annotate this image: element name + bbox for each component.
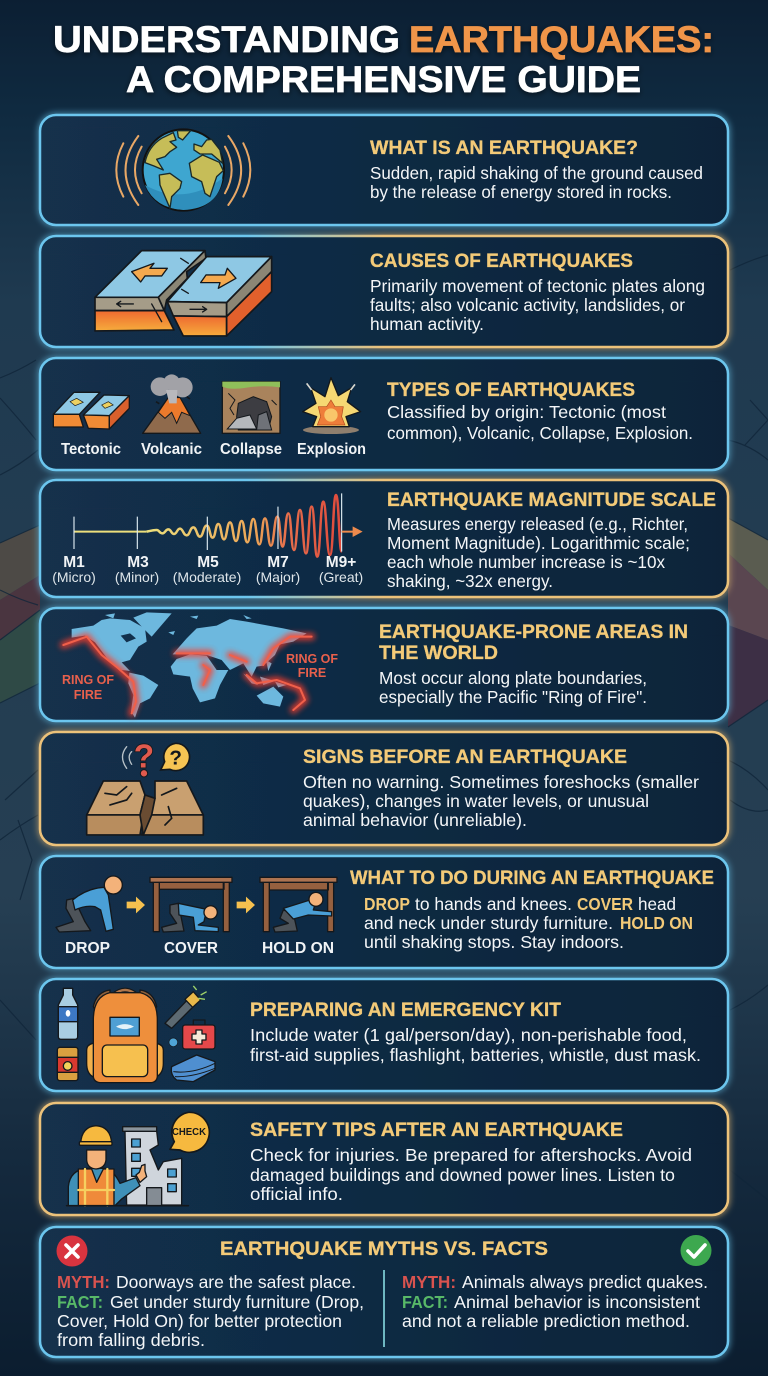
- body text: quakes), changes in water levels, or unusual: [303, 791, 649, 811]
- body text: shaking, ~32x energy.: [387, 571, 553, 591]
- heading: WHAT IS AN EARTHQUAKE?: [370, 137, 638, 159]
- body text: common), Volcanic, Collapse, Explosion.: [387, 423, 693, 443]
- heading: EARTHQUAKE-PRONE AREAS IN: [379, 621, 688, 643]
- scale labels: (Great): [319, 569, 363, 585]
- body text: each whole number increase is ~10x: [387, 552, 665, 572]
- panel: signs before an earthquake: [40, 732, 728, 845]
- action labels: [65, 940, 334, 957]
- scale labels: M1: [63, 554, 85, 571]
- body text: Often no warning. Sometimes foreshocks (smaller: [303, 772, 699, 792]
- icon: cracked ground with question marks: ?: [134, 739, 154, 776]
- scale labels: M9+: [326, 554, 356, 571]
- body text: [370, 163, 703, 202]
- icon: cover under table: [150, 877, 232, 932]
- title: EARTHQUAKES:: [409, 18, 714, 60]
- scale labels: (Minor): [115, 569, 159, 585]
- type labels: Tectonic: [61, 441, 121, 458]
- body text: head: [638, 894, 676, 914]
- heading: TYPES OF EARTHQUAKES: [387, 379, 635, 401]
- left myth and fact: Cover, Hold On) for better protection: [57, 1311, 342, 1331]
- icon: tectonic: [53, 392, 129, 429]
- heading: EARTHQUAKE MAGNITUDE SCALE: [387, 489, 716, 511]
- body text: damaged buildings and downed power lines. Listen to: [250, 1165, 675, 1185]
- body text: Check for injuries. Be prepared for aftershocks. Avoid: [250, 1145, 692, 1165]
- divider: [383, 1270, 385, 1347]
- left myth and fact: Get under sturdy furniture (Drop,: [110, 1292, 364, 1312]
- heading: PREPARING AN EMERGENCY KIT: [250, 999, 561, 1021]
- panel: causes of earthquakes: [40, 236, 728, 347]
- body text: official info.: [250, 1184, 343, 1204]
- icon: hold on under table: [260, 877, 337, 932]
- map: world with ring of fire: [63, 612, 312, 718]
- left myth and fact: [57, 1272, 364, 1350]
- right myth and fact: FACT:: [402, 1292, 448, 1312]
- heading: WHAT TO DO DURING AN EARTHQUAKE: [350, 867, 714, 889]
- scale labels: M3: [127, 554, 149, 571]
- panel: earthquake-prone areas: [40, 608, 728, 721]
- left myth and fact: MYTH:: [57, 1272, 110, 1292]
- right myth and fact: and not a reliable prediction method.: [402, 1311, 690, 1331]
- left myth and fact: Doorways are the safest place.: [116, 1272, 356, 1292]
- body text: Moment Magnitude). Logarithmic scale;: [387, 533, 690, 553]
- body text: faults; also volcanic activity, landslides, or: [370, 295, 685, 315]
- arrow: [237, 897, 255, 913]
- body text: [387, 514, 690, 591]
- icon: cracked ground with question marks: [87, 739, 203, 835]
- body text: Include water (1 gal/person/day), non-perishable food,: [250, 1025, 687, 1045]
- body text: Classified by origin: Tectonic (most: [387, 402, 666, 422]
- body text: until shaking stops. Stay indoors.: [364, 932, 624, 952]
- body text: [364, 894, 693, 952]
- chart: magnitude wave: [74, 493, 363, 557]
- scale labels: M5: [197, 554, 219, 571]
- panel: myths vs facts: [40, 1227, 728, 1357]
- title: [53, 18, 714, 100]
- right myth and fact: Animals always predict quakes.: [462, 1272, 708, 1292]
- body text: DROP: [364, 894, 410, 914]
- body text: [250, 1145, 692, 1204]
- heading: THE WORLD: [379, 642, 498, 664]
- scale labels: (Micro): [52, 569, 96, 585]
- type labels: Explosion: [297, 441, 366, 458]
- type labels: Volcanic: [141, 441, 202, 458]
- body text: especially the Pacific "Ring of Fire".: [379, 687, 647, 707]
- type labels: [61, 441, 366, 458]
- icon: inspector and damaged building: [67, 1112, 209, 1206]
- scale labels: (Moderate): [173, 569, 241, 585]
- panel: safety tips after: [40, 1103, 728, 1215]
- right myth and fact: [402, 1272, 708, 1331]
- icon: cracked ground with question marks: ?: [169, 746, 182, 769]
- body text: HOLD ON: [620, 913, 693, 933]
- title: A COMPREHENSIVE GUIDE: [126, 58, 641, 100]
- heading: [379, 621, 688, 664]
- body text: to hands and knees.: [415, 894, 572, 914]
- action labels: DROP: [65, 940, 110, 957]
- panel: magnitude scale: [40, 480, 728, 597]
- icon: drop: [56, 876, 122, 932]
- map labels: FIRE: [298, 666, 326, 680]
- left myth and fact: from falling debris.: [57, 1330, 205, 1350]
- map labels: [62, 652, 338, 702]
- icon: green check: [680, 1235, 712, 1266]
- icon: tectonic plates: [95, 251, 272, 336]
- body text: first-aid supplies, flashlight, batteries, whistle, dust mask.: [250, 1045, 701, 1065]
- icon: emergency kit items: [57, 986, 215, 1083]
- body text: Measures energy released (e.g., Richter,: [387, 514, 688, 534]
- icon: collapse: [222, 382, 280, 433]
- left myth and fact: FACT:: [57, 1292, 103, 1312]
- heading: EARTHQUAKE MYTHS VS. FACTS: [220, 1238, 548, 1260]
- map labels: RING OF: [62, 673, 114, 687]
- type labels: Collapse: [220, 441, 282, 458]
- heading: CAUSES OF EARTHQUAKES: [370, 250, 633, 272]
- body text: human activity.: [370, 314, 484, 334]
- scale labels: (Major): [256, 569, 300, 585]
- map labels: RING OF: [286, 652, 338, 666]
- bubble label: CHECK: [172, 1127, 207, 1138]
- title: UNDERSTANDING: [53, 18, 400, 60]
- icon: explosion: [303, 378, 361, 434]
- body text: animal behavior (unreliable).: [303, 810, 527, 830]
- heading: SIGNS BEFORE AN EARTHQUAKE: [303, 746, 627, 768]
- right myth and fact: Animal behavior is inconsistent: [454, 1292, 700, 1312]
- panel: what is an earthquake: [40, 115, 728, 225]
- body text: [250, 1025, 701, 1065]
- icon: shaking globe: [116, 129, 250, 211]
- body text: Sudden, rapid shaking of the ground caused: [370, 163, 703, 183]
- body text: [379, 668, 647, 707]
- body text: [387, 402, 693, 443]
- map labels: FIRE: [74, 688, 102, 702]
- icon: red x: [56, 1236, 88, 1266]
- panel: emergency kit: [40, 979, 728, 1091]
- scale labels: M7: [267, 554, 289, 571]
- panel: what to do during: [40, 856, 728, 968]
- body text: COVER: [577, 894, 633, 914]
- action labels: COVER: [164, 940, 218, 957]
- action labels: HOLD ON: [262, 940, 334, 957]
- scale labels: [52, 554, 363, 585]
- panel: types of earthquakes: [40, 358, 728, 470]
- right myth and fact: MYTH:: [402, 1272, 456, 1292]
- arrow: [127, 897, 145, 913]
- body text: Most occur along plate boundaries,: [379, 668, 647, 688]
- body text: Primarily movement of tectonic plates along: [370, 276, 705, 296]
- body text: and neck under sturdy furniture.: [364, 913, 613, 933]
- heading: SAFETY TIPS AFTER AN EARTHQUAKE: [250, 1119, 623, 1141]
- body text: [370, 276, 705, 334]
- body text: by the release of energy stored in rocks.: [370, 182, 672, 202]
- icon: volcano: [143, 374, 201, 433]
- body text: [303, 772, 699, 830]
